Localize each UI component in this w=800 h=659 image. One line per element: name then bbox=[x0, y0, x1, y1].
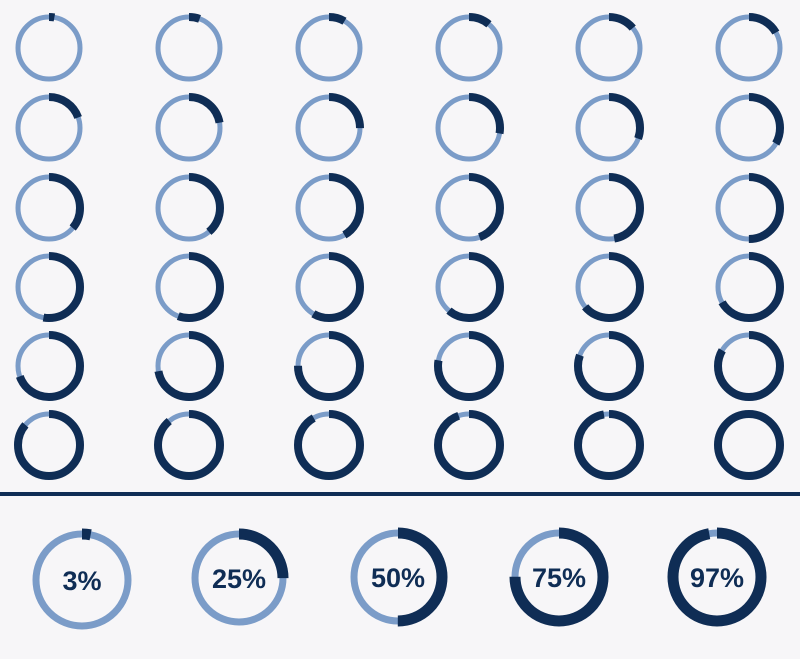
ring: 97%: 97% bbox=[690, 563, 744, 593]
ring: 75% bbox=[515, 533, 603, 621]
ring: 25%: 25% bbox=[212, 564, 266, 594]
ring: 3% bbox=[36, 534, 128, 626]
ring: 50%: 50% bbox=[371, 563, 425, 593]
ring: 25% bbox=[195, 534, 283, 622]
ring: 50% bbox=[354, 533, 442, 621]
ring: 3%: 3% bbox=[62, 566, 102, 596]
grid of progress rings bbox=[18, 17, 780, 476]
ring: 75%: 75% bbox=[532, 563, 586, 593]
ring: 97% bbox=[673, 533, 761, 621]
